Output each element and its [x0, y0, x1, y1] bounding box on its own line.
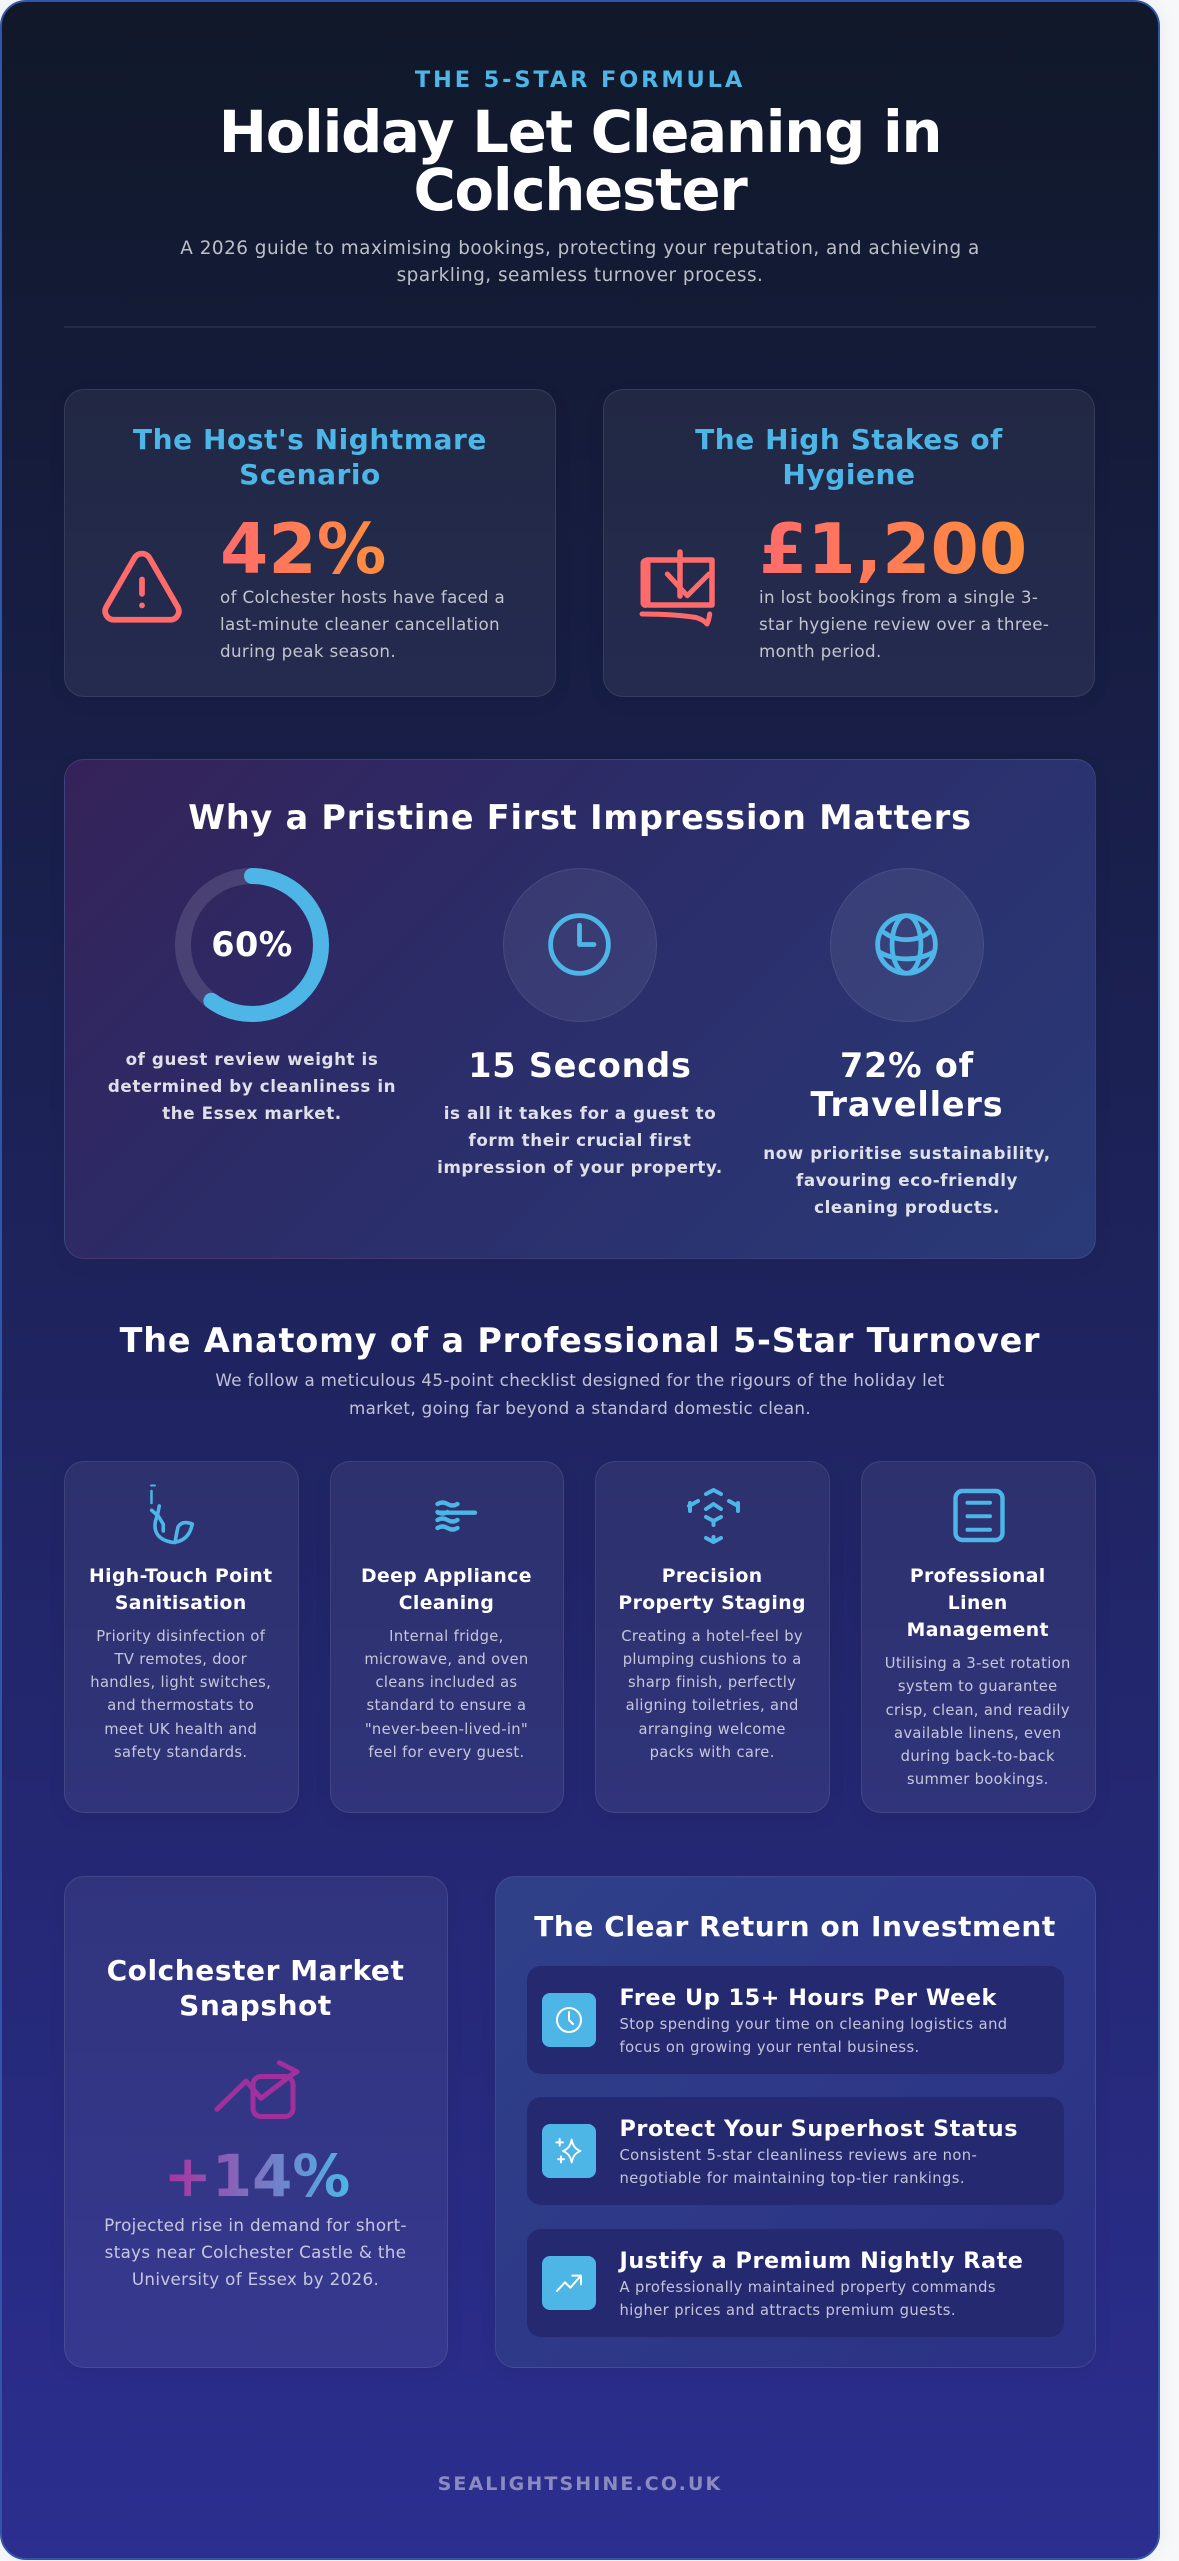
stat caption: impression of your property. — [437, 1157, 723, 1177]
card text: microwave, and oven — [364, 1651, 529, 1668]
card text — [885, 1655, 1071, 1788]
card title — [89, 1566, 272, 1614]
card text: cleans included as — [375, 1674, 517, 1691]
card text: packs with care. — [650, 1744, 775, 1761]
card: professional linen management — [861, 1461, 1096, 1813]
card text — [364, 1628, 529, 1761]
card: precision property staging — [595, 1461, 830, 1813]
card title — [361, 1566, 532, 1614]
stat column: 15 seconds — [437, 868, 723, 1177]
stat column: 60% review weight — [108, 868, 396, 1123]
card text: meet UK health and — [104, 1721, 257, 1738]
section description: market, going far beyond a standard domestic clean. — [349, 1398, 811, 1418]
card text — [90, 1628, 271, 1761]
card title: Linen — [948, 1593, 1008, 1614]
stat value: 72% of — [840, 1046, 974, 1085]
stat description — [220, 587, 505, 661]
stat description: last-minute cleaner cancellation — [220, 614, 500, 634]
stat description: month period. — [759, 641, 882, 661]
ring caption: of guest review weight is — [126, 1049, 378, 1069]
stat description: Projected rise in demand for short- — [104, 2214, 407, 2234]
card text: available linens, even — [894, 1725, 1062, 1742]
stat description — [104, 2214, 407, 2289]
card text: summer bookings. — [907, 1771, 1049, 1788]
section heading: anatomy of a turnover — [120, 1320, 1040, 1418]
heading: market snapshot: Snapshot — [179, 1989, 332, 2022]
card text: during back-to-back — [901, 1748, 1055, 1765]
card text: standard to ensure a — [366, 1697, 526, 1714]
stat caption: is all it takes for a guest to — [444, 1103, 716, 1123]
stat caption: cleaning products. — [814, 1197, 1000, 1217]
card text: Utilising a 3-set rotation — [885, 1655, 1071, 1672]
header — [180, 66, 980, 286]
heading: high stakes — [695, 422, 1003, 490]
benefit text — [620, 2016, 1008, 2056]
benefit: justify premium rate — [526, 2228, 1064, 2336]
card text: safety standards. — [114, 1744, 247, 1761]
title: Holiday Let Cleaning in — [219, 99, 941, 166]
card text: system to guarantee — [898, 1678, 1058, 1695]
benefit text: Stop spending your time on cleaning logistics and — [620, 2016, 1008, 2032]
card text: plumping cushions to a — [623, 1651, 802, 1668]
icon: sparkles — [542, 2124, 596, 2178]
card text: and thermostats to — [107, 1697, 254, 1714]
stat caption: form their crucial first — [468, 1130, 692, 1150]
stat caption — [437, 1103, 723, 1177]
card text — [621, 1628, 803, 1761]
benefit text: higher prices and attracts premium guests. — [620, 2302, 956, 2318]
card title — [618, 1566, 806, 1614]
card text: aligning toiletries, and — [626, 1697, 799, 1714]
card title: High-Touch Point — [89, 1566, 272, 1587]
stat description: during peak season. — [220, 641, 396, 661]
card title: Precision — [662, 1566, 763, 1587]
stat caption — [763, 1142, 1051, 1217]
stat: 42%: 42% — [220, 509, 386, 590]
icon: trending up — [542, 2256, 596, 2310]
heading: nightmare scenario: Scenario — [239, 458, 381, 490]
stat description: University of Essex by 2026. — [132, 2269, 379, 2289]
heading: nightmare scenario: The Host's Nightmare — [133, 422, 487, 456]
ring caption: determined by cleanliness in — [108, 1076, 396, 1096]
benefit text: focus on growing your rental business. — [620, 2038, 920, 2056]
benefit title: Justify a Premium Nightly Rate — [620, 2248, 1023, 2274]
card text: "never-been-lived-in" — [365, 1721, 528, 1738]
panel: the host's nightmare scenario — [64, 389, 556, 697]
benefit: free up hours — [526, 1966, 1064, 2074]
card text: TV remotes, door — [115, 1651, 247, 1668]
panel: the clear return on investment — [495, 1876, 1096, 2368]
panel: colchester market snapshot — [64, 1876, 448, 2368]
subtitle: sparkling, seamless turnover process. — [397, 265, 763, 286]
stat description: in lost bookings from a single 3- — [759, 587, 1038, 607]
stat description — [759, 587, 1049, 661]
heading: high stakes: The High Stakes of — [695, 422, 1003, 456]
section description: We follow a meticulous 45-point checklist designed for the rigours of the holiday let — [215, 1370, 945, 1390]
stat column: 72% of travellers — [763, 868, 1051, 1217]
icon: clock — [542, 1992, 596, 2046]
stat description: of Colchester hosts have faced a — [220, 587, 505, 607]
benefit text — [620, 2278, 996, 2318]
card title — [907, 1566, 1049, 1641]
ring caption — [108, 1049, 396, 1123]
progress ring 60% — [175, 868, 329, 1022]
heading: nightmare scenario — [133, 422, 487, 490]
card text: arranging welcome — [638, 1721, 786, 1738]
card title: Deep Appliance — [361, 1566, 532, 1587]
benefit title: Free Up 15+ Hours Per Week — [620, 1984, 997, 2010]
card text: Priority disinfection of — [96, 1628, 265, 1644]
card text: Creating a hotel-feel by — [621, 1628, 803, 1644]
card title: Sanitisation — [115, 1593, 247, 1614]
heading: market snapshot — [107, 1954, 404, 2022]
stat caption: favouring eco-friendly — [796, 1170, 1018, 1190]
card title: Property Staging — [618, 1593, 806, 1614]
icon: clock in circle — [503, 868, 657, 1022]
card text: feel for every guest. — [368, 1744, 524, 1761]
title — [219, 99, 941, 224]
stat: £1,200: £1,200 — [759, 509, 1027, 590]
stat description: star hygiene review over a three- — [759, 614, 1049, 634]
icon: warning triangle — [102, 550, 182, 623]
title: Colchester — [413, 156, 747, 224]
heading: market snapshot: Colchester Market — [107, 1954, 404, 1987]
stat caption: now prioritise sustainability, — [763, 1142, 1051, 1162]
benefit: protect superhost status — [526, 2097, 1064, 2205]
stat value — [810, 1046, 1003, 1124]
heading: first impression: Why a Pristine First Impression Matters — [188, 798, 972, 837]
eyebrow: the 5-star formula: THE 5-STAR FORMULA — [415, 66, 745, 92]
ring value: 60% — [211, 925, 293, 964]
subtitle: A 2026 guide to maximising bookings, protecting your reputation, and achieving a — [180, 238, 980, 259]
benefit text — [620, 2147, 977, 2187]
card title: Professional — [910, 1566, 1046, 1587]
benefit text: negotiable for maintaining top-tier rankings. — [620, 2170, 965, 2187]
section description — [215, 1370, 945, 1418]
ring caption: the Essex market. — [162, 1103, 342, 1123]
benefit text: Consistent 5-star cleanliness reviews are non- — [620, 2147, 977, 2164]
heading text: The Anatomy of a Professional 5-Star Turnover — [120, 1320, 1040, 1360]
card text: handles, light switches, — [90, 1674, 271, 1691]
stat value: Travellers — [811, 1085, 1003, 1124]
card title: Management — [907, 1620, 1049, 1641]
benefit text: A professionally maintained property commands — [620, 2278, 996, 2296]
panel: why a pristine first impression matters — [64, 759, 1096, 1259]
card title: Cleaning — [399, 1593, 494, 1614]
benefit title: Protect Your Superhost Status — [620, 2116, 1018, 2142]
stat: +14%: +14% — [164, 2142, 350, 2210]
heading: return on investment: The Clear Return on Investment — [534, 1910, 1056, 1942]
card: deep appliance cleaning — [330, 1461, 564, 1813]
icon: globe in circle — [830, 868, 984, 1022]
subtitle — [180, 238, 980, 286]
heading: high stakes: Hygiene — [782, 458, 916, 490]
card text: sharp finish, perfectly — [628, 1674, 796, 1691]
stat value: 15 Seconds — [468, 1046, 692, 1085]
panel: the high stakes of hygiene — [603, 389, 1095, 697]
card text: Internal fridge, — [389, 1628, 504, 1644]
footer: website: SEALIGHTSHINE.CO.UK — [438, 2472, 722, 2494]
card: high-touch point sanitisation — [64, 1461, 298, 1813]
card text: crisp, clean, and readily — [886, 1702, 1070, 1719]
stat description: stays near Colchester Castle & the — [105, 2242, 406, 2262]
